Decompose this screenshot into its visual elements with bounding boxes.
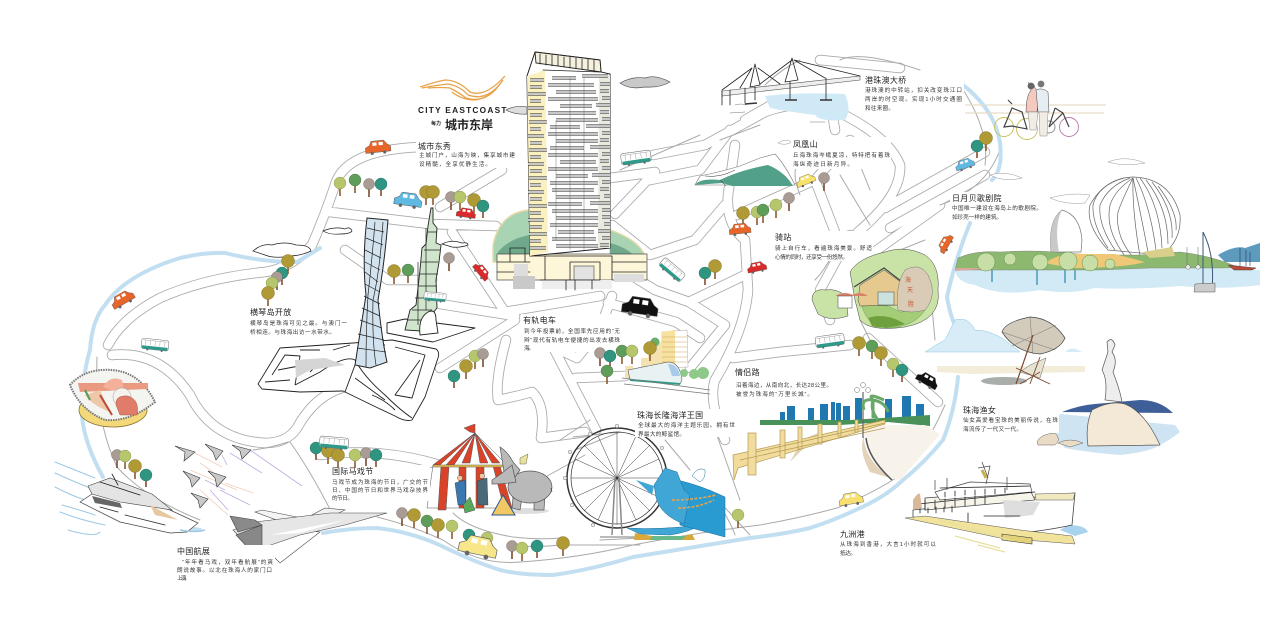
text: circus festival: 日、中国的节日和世界马戏杂技界: [332, 486, 428, 494]
logo: City Eastcoast: CITY EASTCOAST: [418, 105, 508, 115]
illustration: jet formation: [175, 444, 387, 563]
red sailboat: [1228, 265, 1256, 270]
illustration: Jiuzhou port ferry: [905, 462, 1088, 552]
couple: [1026, 81, 1049, 136]
skyscraper: twisted blue tower: [355, 218, 388, 368]
text: ocean kingdom: 珠海长隆海洋王国: [637, 410, 703, 420]
text: fisher girl: 珠海渔女: [963, 405, 996, 415]
elephant: [492, 447, 552, 514]
logo: City Eastcoast: 每力: [431, 120, 441, 127]
small shell: [1050, 210, 1082, 252]
trees: [112, 132, 992, 561]
skyscraper: green stepped tower: [405, 208, 441, 335]
text: city show: [416, 140, 518, 168]
text: Hengqin: 横琴岛是珠海可见之最。与澳门一: [250, 319, 347, 327]
illustration: garden cottage with rock: 海: [905, 276, 911, 284]
text: Hengqin: 横琴岛开放: [250, 307, 292, 317]
carved rock: [897, 267, 932, 312]
park land: [955, 251, 1240, 270]
text: opera house: 如珍壳一样的建筑。: [952, 213, 1002, 221]
big shell: [1089, 177, 1180, 256]
text: Jiuzhou port: [838, 529, 938, 557]
text: air show: 上演。: [177, 574, 190, 582]
text: cycling: 骑站: [775, 232, 792, 242]
text: circus festival: [330, 465, 430, 502]
illustration: ocean kingdom whale: [627, 468, 725, 540]
illustration: Phoenix mountain: [695, 154, 795, 186]
text: Hengqin: [248, 305, 348, 336]
text: Phoenix mountain: [791, 137, 891, 169]
text: circus festival: 马戏节成为珠海的节日，广交的节: [332, 478, 428, 486]
main jet: [230, 508, 387, 563]
skyline: [780, 396, 924, 420]
text: bridge: 和往来圈。: [865, 104, 894, 112]
text: lovers road: [733, 366, 835, 398]
logo waves: [420, 76, 505, 100]
text: city show: 主城门户，山海为映，集享城市建: [419, 151, 515, 159]
complex: Hengqin plaza plan: [258, 319, 475, 420]
text: tram: [521, 314, 622, 352]
text: bridge: 港珠澳大桥: [865, 75, 906, 85]
text: fisher girl: 仙女高爱看宝珠的美丽传说，在珠: [963, 416, 1058, 424]
illustration: seafood platter: [70, 370, 155, 427]
text: Phoenix mountain: 凤凰山: [793, 139, 818, 149]
podium base: [493, 210, 647, 290]
illustration: yacht: [55, 462, 205, 535]
text: lovers road: 情侣路: [735, 367, 760, 377]
text: air show: [175, 545, 275, 582]
tower body: [527, 52, 610, 256]
text: tram: 有轨电车: [523, 315, 556, 325]
illustration: garden cottage with rock: [812, 249, 938, 328]
text: ocean kingdom: [635, 409, 737, 438]
text: air show: 中国航展: [177, 546, 210, 556]
text: Jiuzhou port: 抵达。: [840, 549, 856, 557]
illustration: beach umbrella: [925, 317, 1085, 385]
text: Jiuzhou port: 从珠海到香港，大言1小时就可以: [840, 540, 936, 548]
text: Phoenix mountain: 海纵奇迹日新月异。: [793, 160, 853, 168]
white sailboat: [1203, 232, 1213, 290]
bicycle: [994, 100, 1078, 140]
illustration: Sun Moon Shell opera house: [955, 177, 1260, 293]
text: ocean kingdom: 界最大的鲸鲨馆。: [638, 430, 685, 438]
performers: [455, 473, 488, 513]
text: bridge: 两岸的时空观。实现1小时交通圈: [865, 95, 962, 103]
tent: [427, 424, 515, 510]
trails: [190, 450, 302, 515]
building: city eastcoast tower: [493, 52, 647, 290]
illustration: tram and station: [622, 330, 710, 394]
logo: City Eastcoast: [418, 76, 508, 132]
drum: [492, 495, 515, 515]
illustration: couple with bicycles: [965, 81, 1106, 140]
text: bridge: 港珠澳的中转站，扣关改变珠江口: [865, 86, 962, 94]
illustration: circus tent and elephant: [427, 424, 552, 515]
text: Hengqin: 桥相连。与珠海出访一水带水。: [250, 328, 335, 336]
clouds: [253, 77, 1145, 257]
text: tram: 到今年投票前，全国率先应用的“无: [524, 327, 620, 335]
illustration: Zhuhai fisher girl: [1037, 340, 1180, 455]
logo: City Eastcoast: 城市东岸: [445, 117, 493, 132]
bridge: Hong Kong-Zhuhai-Macao: [722, 58, 860, 122]
illustration: ferris wheel: [563, 424, 667, 537]
text: lovers road: 沿着海边，从南向北，长达28公里。: [736, 381, 832, 389]
street lamp and palm: [854, 382, 888, 438]
text: fisher girl: [961, 405, 1059, 433]
text: lovers road: 被誉为珠海的“万里长城”。: [736, 390, 813, 398]
balustrade: [733, 420, 885, 480]
text: opera house: [950, 192, 1044, 221]
text: circus festival: 国际马戏节: [332, 466, 374, 476]
text: tram: 辫”现代有轨电车便捷的出发去横珠: [524, 336, 620, 344]
vehicles: [109, 139, 976, 561]
ground: [860, 425, 940, 480]
small jets: [175, 444, 251, 508]
text: city show: 城市东秀: [418, 141, 451, 151]
text: opera house: 中国唯一建设在海岛上的歌剧院。: [952, 204, 1042, 212]
text: cycling: [773, 231, 873, 261]
text: air show: 朗说故事。以北在珠海人的家门口: [177, 566, 272, 574]
text: air show: “年年看马戏，双年看航展”的爽: [182, 558, 273, 566]
text: cycling: 骑上自行车，看遍珠海美景。舒适: [775, 244, 872, 252]
text: Jiuzhou port: 九洲港: [840, 529, 865, 539]
text: tram: 海。: [524, 344, 534, 352]
water: [955, 267, 1260, 293]
text: Phoenix mountain: 丘海珠海岑峨夏凉，特特把有着珠: [793, 151, 890, 159]
road network: [97, 57, 1000, 563]
illustration: garden cottage with rock: 天: [907, 287, 913, 294]
illustration: garden cottage with rock: 胜: [908, 300, 914, 308]
text: fisher girl: 海流传了一代又一代。: [963, 425, 1022, 433]
text: city show: 设精髓，全享优静生活。: [419, 160, 491, 168]
illustration: lovers road promenade: [733, 382, 940, 480]
coastline river: [82, 85, 1001, 575]
text: ocean kingdom: 全球最大的海洋主题乐园。拥有世: [638, 421, 735, 429]
text: bridge: [862, 74, 964, 112]
text: cycling: 心情的同时，还享受一份悠然。: [775, 253, 848, 261]
text: circus festival: 的节日。: [332, 494, 353, 502]
mountains: [1218, 243, 1260, 262]
text: opera house: 日月贝歌剧院: [952, 193, 1002, 203]
